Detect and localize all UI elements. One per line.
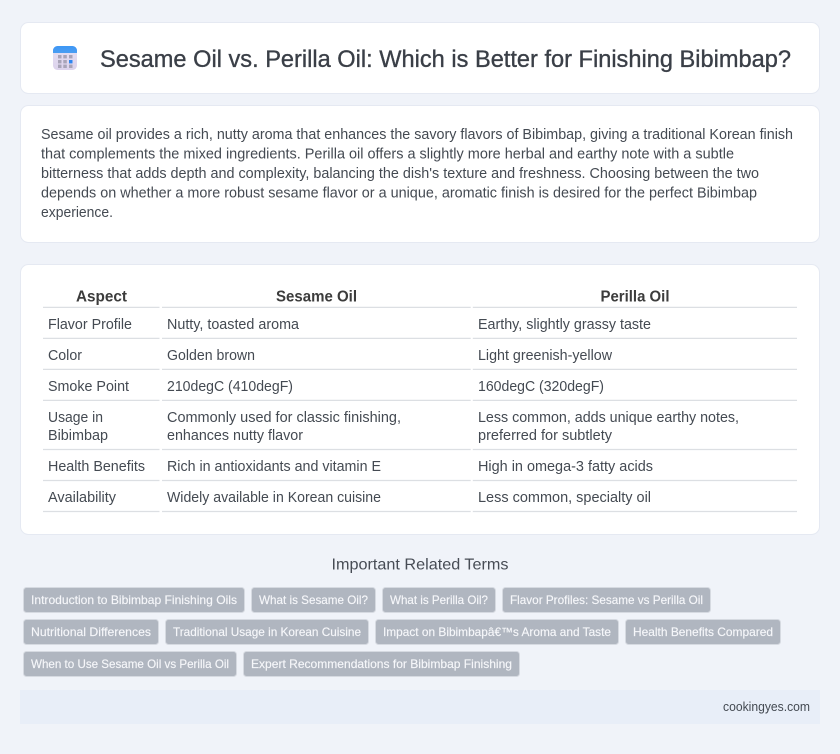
footer: cookingyes.com [723,700,810,714]
table header: Aspect [76,288,127,306]
tag [166,620,368,644]
text block: introduction: depends on whether a more robust sesame flavor or a unique, aromatic finish is desired for the perfect Bibimbap [41,186,757,202]
row: usage in bibimbap [43,410,797,450]
tags: related terms [24,588,780,676]
tag [244,652,520,676]
row: usage in bibimbap: Commonly used for classic finishing, [167,410,401,426]
icon: calendar [53,46,77,70]
row: usage in bibimbap: Usage in [48,410,103,426]
row: smoke point: 160degC (320degF) [478,379,604,395]
tag [24,588,244,612]
row: availability: Less common, specialty oil [478,490,651,506]
tag [252,588,376,612]
row: flavor profile [43,317,797,338]
row: availability [43,490,797,512]
heading: related terms: Important Related Terms [332,556,508,574]
tag: Nutritional Differences [31,625,151,639]
row: smoke point: 210degC (410degF) [167,379,293,395]
row: usage in bibimbap: Bibimbap [48,428,108,444]
tag: Health Benefits Compared [633,625,773,639]
tag [382,588,496,612]
tag: Flavor Profiles: Sesame vs Perilla Oil [510,593,703,607]
text block: introduction: that complements the mixed ingredients. Perilla oil offers a slightly more herbal and earthy note with a subtle [41,146,734,162]
row: availability: Availability [48,490,117,506]
panel: introduction [20,106,820,242]
table header: Sesame Oil [276,288,357,306]
text block: introduction: Sesame oil provides a rich, nutty aroma that enhances the savory flavors of Bibimbap, giving a traditional Korean finish [41,127,793,143]
row: smoke point: Smoke Point [48,379,129,395]
tag: Traditional Usage in Korean Cuisine [173,625,361,639]
tag [626,620,780,644]
table header: Perilla Oil [600,288,670,306]
tag: What is Perilla Oil? [390,593,488,607]
panel: header [20,22,820,94]
row: health benefits: High in omega-3 fatty acids [478,459,653,475]
row: health benefits [43,459,797,480]
row: availability: Widely available in Korean cuisine [167,490,381,506]
tag: Expert Recommendations for Bibimbap Finishing [251,657,512,671]
row: health benefits: Rich in antioxidants and vitamin E [167,459,381,475]
tag [24,652,236,676]
row: flavor profile: Earthy, slightly grassy taste [478,317,651,333]
row: usage in bibimbap: enhances nutty flavor [167,428,303,444]
text block: introduction: bitterness that adds depth and complexity, balancing the dish's texture and freshness. Choosing between the two [41,166,759,182]
row: color [43,348,797,369]
tag: What is Sesame Oil? [259,593,368,607]
tag [376,620,618,644]
row: flavor profile: Nutty, toasted aroma [167,317,300,333]
tag: When to Use Sesame Oil vs Perilla Oil [31,657,229,671]
text block: introduction [41,127,793,221]
row: color: Light greenish-yellow [478,348,613,364]
row: smoke point [43,379,797,400]
footer [20,690,820,724]
row: usage in bibimbap: preferred for subtlety [478,428,613,444]
text block: introduction: experience. [41,205,113,221]
row: color: Color [48,348,82,364]
panel: comparison table [20,264,820,534]
row: usage in bibimbap: Less common, adds unique earthy notes, [478,410,739,426]
tag: Introduction to Bibimbap Finishing Oils [31,593,237,607]
row: color: Golden brown [167,348,255,364]
tag [24,620,158,644]
tag: Impact on Bibimbapâ€™s Aroma and Taste [383,625,611,639]
title: Sesame Oil vs. Perilla Oil: Which is Better for Finishing Bibimbap? [100,46,791,73]
row: health benefits: Health Benefits [48,459,145,475]
table header [43,288,797,307]
row: flavor profile: Flavor Profile [48,317,132,333]
tag [502,588,710,612]
